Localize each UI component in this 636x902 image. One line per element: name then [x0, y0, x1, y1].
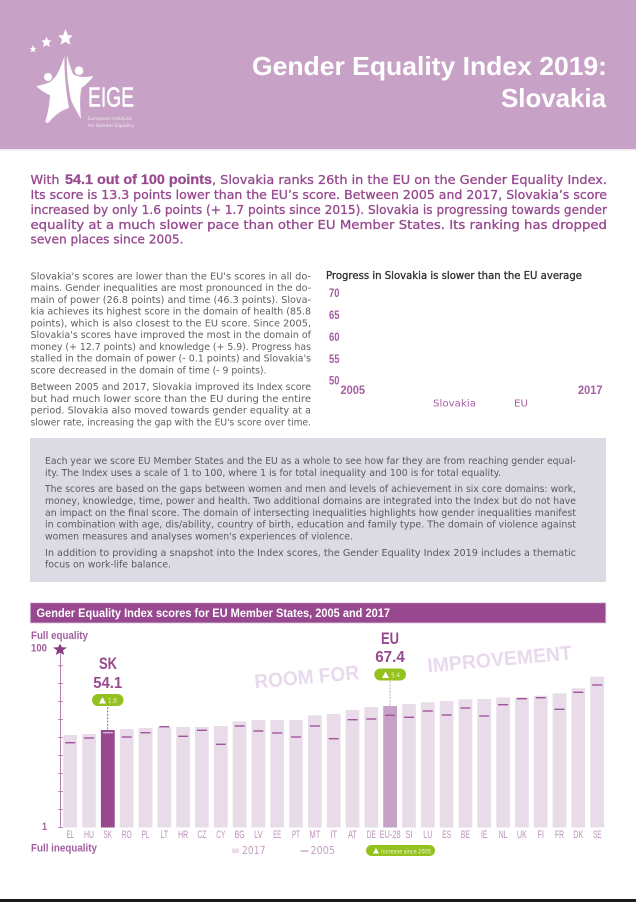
- text block: domain scores narrative: score decreased in the domain of time (- 9 points).: [30, 365, 266, 376]
- x axis labels: 2017: [578, 385, 602, 397]
- axis end labels: Full equality: [31, 630, 88, 642]
- annotation: room for improvement: ROOM FOR: [253, 662, 361, 693]
- title: Gender Equality Index 2019:: [252, 51, 607, 81]
- country labels: DK: [573, 829, 584, 841]
- y axis labels: 60: [329, 332, 340, 344]
- country labels: EE: [273, 829, 281, 841]
- country labels: IT: [330, 829, 337, 841]
- chart: Gender Equality Index bar chart: [31, 630, 604, 857]
- bar: EU-28: [383, 706, 397, 828]
- callout: Slovakia score: [92, 655, 124, 730]
- text block: domain scores narrative: main of power (26.8 points) and time (46.3 points). Slova-: [30, 295, 311, 306]
- panel: about the Index: in combination with age, dis/ability, country of birth, education and family type. The domain of violence against: [45, 520, 576, 530]
- banner heading: scores for EU Member States: Gender Equality Index scores for EU Member States, 2005 and 2017: [36, 606, 390, 620]
- text block: domain scores narrative: period. Slovakia also moved towards gender equality at a: [30, 406, 311, 417]
- callout: EU score: [374, 630, 406, 706]
- y axis with ticks: [58, 650, 63, 828]
- panel: about the Index: money, knowledge, time, power and health. Two additional domains are integrated into the Index but do not have: [45, 496, 576, 507]
- country labels: [66, 829, 601, 841]
- title: [252, 51, 607, 113]
- panel: about the Index: [30, 438, 606, 582]
- callout: Slovakia score: 1.6: [108, 697, 117, 705]
- text block: domain scores narrative: mains. Gender inequalities are most pronounced in the do-: [30, 283, 311, 294]
- text block: domain scores narrative: Slovakia's scores have improved the most in the domain of: [30, 330, 312, 341]
- axis end labels: [31, 630, 97, 854]
- callout: EU score: EU: [381, 630, 399, 648]
- text block: key findings introduction: [30, 171, 608, 246]
- country labels: CZ: [197, 829, 207, 841]
- y axis labels: 55: [329, 354, 340, 366]
- chart legend: Slovakia: [433, 398, 476, 410]
- country labels: LU: [423, 829, 432, 841]
- axis end labels: Full inequality: [31, 842, 97, 854]
- banner heading: scores for EU Member States: [30, 603, 606, 623]
- panel: about the Index: In addition to providing a snapshot into the Index scores, the Gender Equality Index 2019 includes a thematic: [45, 548, 576, 559]
- country labels: EL: [66, 829, 74, 841]
- text block: domain scores narrative: slower rate, increasing the gap with the EU's score over time.: [30, 417, 311, 428]
- country labels: EU-28: [380, 829, 401, 841]
- icon: EIGE logo: EIGE: [88, 82, 134, 112]
- callout: EU score: 67.4: [375, 649, 405, 666]
- text block: domain scores narrative: money (+ 12.7 points) and knowledge (+ 5.9). Progress has: [30, 342, 311, 353]
- annotation: room for improvement: [253, 642, 573, 693]
- legend: [232, 845, 435, 857]
- country labels: BG: [235, 829, 245, 841]
- annotation: room for improvement: IMPROVEMENT: [426, 642, 573, 677]
- text block: key findings introduction: With: [30, 172, 60, 187]
- panel: about the Index: focus on work-life balance.: [45, 560, 171, 570]
- axis end labels: 100: [31, 642, 47, 654]
- country labels: BE: [461, 829, 470, 841]
- country labels: LT: [161, 829, 168, 841]
- country labels: FR: [555, 829, 564, 841]
- text block: key findings introduction: Its score is 13.3 points lower than the EU’s score. Between 2005 and 2017, Slovakia’s score: [30, 187, 607, 202]
- panel: about the Index: ity. The Index uses a scale of 1 to 100, where 1 is for total inequality and 100 is for total equality.: [45, 468, 501, 479]
- axis end labels: 1: [42, 821, 47, 833]
- y axis labels: 70: [329, 288, 340, 300]
- panel: about the Index: women measures and analyses women's experiences of violence.: [45, 532, 353, 542]
- markers: 2005 scores: [65, 684, 602, 745]
- chart heading: Progress in Slovakia is slower than the EU average: [326, 270, 582, 282]
- text block: domain scores narrative: Slovakia's scores are lower than the EU's scores in all do-: [30, 272, 311, 282]
- country labels: SK: [104, 829, 112, 841]
- title: Slovakia: [501, 83, 607, 113]
- text block: key findings introduction: , Slovakia ranks 26th in the EU on the Gender Equality Index.: [212, 172, 607, 187]
- country labels: ES: [442, 829, 451, 841]
- text block: domain scores narrative: kia achieves its highest score in the domain of health (85.8: [30, 307, 311, 318]
- panel: about the Index: Each year we score EU Member States and the EU as a whole to see how far they are from reaching gender equal-: [45, 456, 576, 467]
- panel: about the Index: an impact on the final score. The domain of intersecting inequalities highlights how gender inequalities manifest: [45, 508, 576, 519]
- x axis labels: [340, 385, 602, 397]
- text block: key findings introduction: equality at a much slower pace than other EU Member States. Its ranking has dropped: [30, 217, 607, 232]
- bars: 2017 scores: [63, 677, 604, 828]
- icon: EIGE logo: European Institute: [88, 116, 132, 122]
- country labels: PL: [142, 829, 150, 841]
- text block: domain scores narrative: Between 2005 and 2017, Slovakia improved its Index score: [30, 382, 311, 393]
- text block: domain scores narrative: but had much lower score than the EU during the entire: [30, 394, 311, 405]
- chart legend: [433, 398, 528, 410]
- country labels: FI: [537, 829, 544, 841]
- country labels: PT: [292, 829, 300, 841]
- y axis labels: 65: [329, 310, 340, 322]
- country labels: SI: [406, 829, 412, 841]
- country labels: MT: [309, 829, 321, 841]
- country labels: AT: [348, 829, 357, 841]
- text block: key findings introduction: 54.1 out of 100 points: [65, 171, 212, 187]
- icon: full equality star: [53, 644, 67, 655]
- country labels: LV: [254, 829, 263, 841]
- country labels: NL: [499, 829, 508, 841]
- text block: domain scores narrative: [30, 272, 312, 428]
- text block: key findings introduction: seven places since 2005.: [30, 232, 184, 246]
- y axis labels: 50: [329, 376, 340, 388]
- callout: EU score: 5.4: [391, 672, 400, 680]
- country labels: DE: [367, 829, 376, 841]
- country labels: RO: [122, 829, 132, 841]
- callout: Slovakia score: SK: [99, 655, 117, 673]
- icon: EIGE logo: [30, 29, 134, 129]
- y axis labels: [329, 288, 340, 388]
- text block: domain scores narrative: points), which is also closest to the EU score. Since 2005,: [30, 318, 311, 329]
- icon: EIGE logo: for Gender Equality: [88, 123, 134, 129]
- panel: header band: [0, 0, 636, 150]
- chart legend: EU: [514, 398, 528, 410]
- country labels: SE: [593, 829, 601, 841]
- country labels: HR: [178, 829, 188, 841]
- country labels: IE: [481, 829, 487, 841]
- country labels: HU: [84, 829, 94, 841]
- country labels: UK: [517, 829, 527, 841]
- bar: Slovakia: [101, 730, 115, 828]
- legend: 2017: [242, 845, 266, 857]
- x axis labels: 2005: [340, 385, 366, 397]
- panel: about the Index: The scores are based on the gaps between women and men and levels of achievement in six core domains: work,: [44, 484, 576, 495]
- chart: progress line chart (axis and legend only): [326, 270, 602, 410]
- legend: Increase since 2005: [381, 847, 431, 855]
- text block: key findings introduction: increased by only 1.6 points (+ 1.7 points since 2015). Slovakia is progressing towards gender: [30, 202, 608, 217]
- country labels: CY: [216, 829, 226, 841]
- callout: Slovakia score: 54.1: [93, 675, 122, 692]
- legend: 2005: [310, 845, 335, 857]
- text block: domain scores narrative: stalled in the domain of power (- 0.1 points) and Slovakia's: [30, 354, 311, 365]
